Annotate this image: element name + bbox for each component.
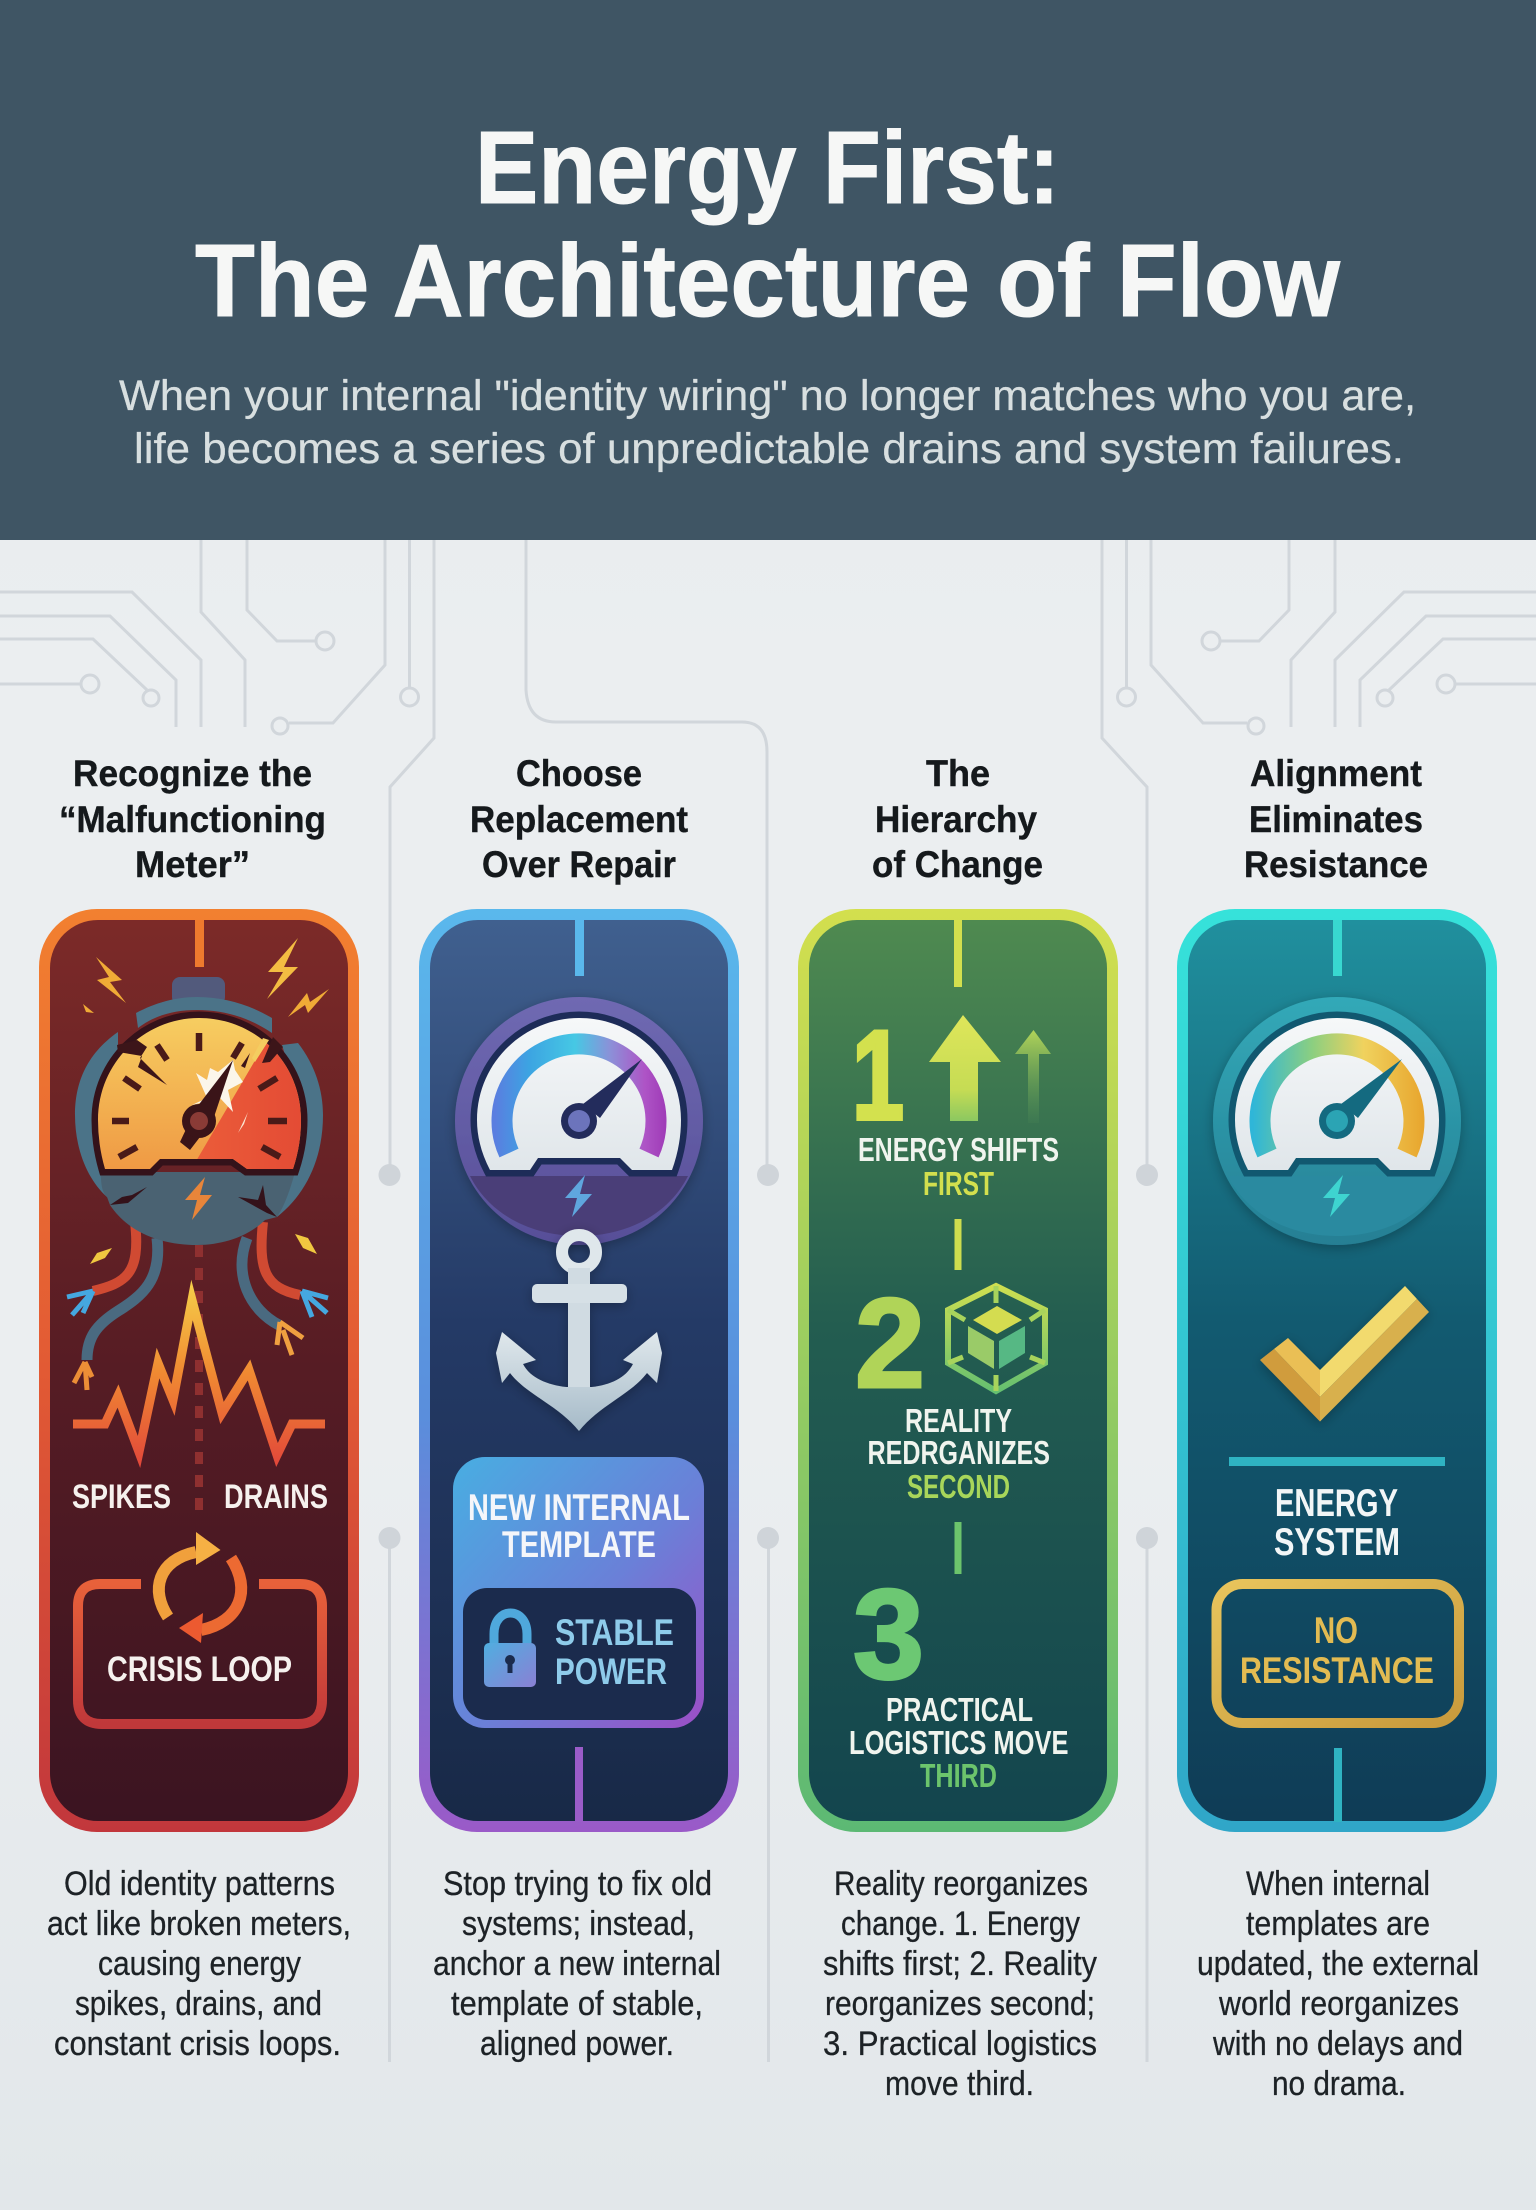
label: crisis loop: CRISIS LOOP	[107, 1650, 292, 1689]
chart: pulse line	[73, 1300, 325, 1455]
subtitle	[119, 372, 1416, 473]
icon: lock	[484, 1613, 536, 1687]
icon: up arrows	[929, 1015, 1051, 1123]
icon: stable gauge	[455, 997, 703, 1245]
description: column 2: Stop trying to fix old	[443, 1865, 712, 1903]
description: column 3: move third.	[885, 2065, 1034, 2103]
description: column 4: updated, the external	[1197, 1945, 1479, 1983]
icon: cracked gauge	[75, 977, 323, 1245]
description: column 4: no drama.	[1272, 2065, 1406, 2103]
column 3 heading: of Change	[872, 844, 1043, 885]
crisis loop box	[78, 1584, 322, 1724]
column 2 heading: Replacement	[470, 799, 688, 840]
step 1	[852, 1004, 1059, 1202]
header banner	[0, 0, 1536, 540]
icon: check mark	[1260, 1286, 1429, 1422]
description: column 4: When internal	[1246, 1865, 1430, 1903]
label: energy system	[1274, 1482, 1400, 1564]
description: column 1	[47, 1865, 351, 2063]
description: column 1: spikes, drains, and	[75, 1985, 322, 2023]
description: column 2	[433, 1865, 721, 2063]
step 3: 3	[853, 1563, 924, 1705]
label: energy system: ENERGY	[1275, 1482, 1398, 1525]
description: column 2: anchor a new internal	[433, 1945, 721, 1983]
icon: lightning bolts	[83, 938, 329, 1264]
icon: loop arrows	[159, 1532, 241, 1643]
step 2: SECOND	[907, 1468, 1010, 1505]
column 3 heading: The	[926, 753, 990, 794]
description: column 3: Reality reorganizes	[834, 1865, 1088, 1903]
description: column 3: shifts first; 2. Reality	[823, 1945, 1097, 1983]
title	[195, 110, 1341, 338]
description: column 3: reorganizes second;	[825, 1985, 1095, 2023]
box: no resistance	[1216, 1584, 1459, 1723]
icon: anchor	[496, 1235, 662, 1431]
description: column 1: constant crisis loops.	[54, 2025, 341, 2063]
box: new internal template: NEW INTERNAL	[468, 1487, 690, 1528]
description: column 1: act like broken meters,	[47, 1905, 351, 1943]
panel: replacement	[419, 909, 739, 1832]
labels: spikes and drains: DRAINS	[224, 1478, 328, 1516]
column 1 heading: “Malfunctioning	[59, 799, 326, 840]
column 4 heading: Resistance	[1244, 844, 1428, 885]
description: column 3	[823, 1865, 1097, 2103]
gauge dial	[98, 1018, 301, 1169]
step 1: ENERGY SHIFTS	[858, 1131, 1059, 1168]
description: column 3: 3. Practical logistics	[823, 2025, 1097, 2063]
description: column 4: with no delays and	[1212, 2025, 1463, 2063]
icon: aligned gauge	[1213, 997, 1461, 1245]
column 1 heading	[59, 753, 326, 885]
subtitle: life becomes a series of unpredictable drains and system failures.	[134, 425, 1404, 473]
description: column 4: world reorganizes	[1218, 1985, 1459, 2023]
step 2: REALITY	[905, 1402, 1012, 1439]
box: new internal template: TEMPLATE	[502, 1524, 656, 1565]
labels: spikes and drains: SPIKES	[72, 1478, 171, 1516]
column 3 heading: Hierarchy	[875, 799, 1037, 840]
description: column 2: systems; instead,	[462, 1905, 695, 1943]
description: column 4: templates are	[1246, 1905, 1430, 1943]
column 4 heading: Alignment	[1250, 753, 1422, 794]
box: new internal template	[453, 1457, 704, 1728]
title: Energy First:	[475, 110, 1060, 225]
step 3: LOGISTICS MOVE	[849, 1724, 1068, 1761]
description: column 3: change. 1. Energy	[841, 1905, 1080, 1943]
column 1 heading: Recognize the	[73, 753, 312, 794]
column 1 heading: Meter”	[135, 844, 250, 885]
step 2: 2	[855, 1272, 925, 1414]
background circuit traces	[0, 540, 1536, 2062]
label: energy system: SYSTEM	[1274, 1521, 1400, 1564]
step 1: FIRST	[923, 1165, 994, 1202]
description: column 4	[1197, 1865, 1479, 2103]
panel: alignment	[1177, 909, 1497, 1832]
step 2: REDRGANIZES	[868, 1434, 1050, 1471]
subtitle: When your internal "identity wiring" no longer matches who you are,	[119, 372, 1416, 420]
column 4 heading	[1244, 753, 1428, 885]
column 3 heading	[872, 753, 1043, 885]
labels: spikes and drains	[72, 1478, 328, 1516]
column 2 heading: Choose	[516, 753, 642, 794]
title: The Architecture of Flow	[195, 223, 1341, 338]
description: column 1: causing energy	[98, 1945, 301, 1983]
center dashed line	[195, 1245, 203, 1510]
box: new internal template: STABLE	[555, 1612, 674, 1653]
icon: frayed wires	[67, 1222, 328, 1390]
step 3	[849, 1563, 1068, 1794]
step 2	[855, 1272, 1050, 1505]
column 4 heading: Eliminates	[1249, 799, 1423, 840]
icon: cube	[948, 1286, 1045, 1391]
column 2 heading: Over Repair	[482, 844, 676, 885]
description: column 2: aligned power.	[480, 2025, 674, 2063]
step 1: 1	[852, 1004, 904, 1146]
box: new internal template: POWER	[555, 1651, 667, 1692]
box: no resistance: RESISTANCE	[1240, 1650, 1434, 1691]
step 3: PRACTICAL	[886, 1691, 1033, 1728]
description: column 1: Old identity patterns	[64, 1865, 335, 1903]
step 3: THIRD	[920, 1757, 997, 1794]
box: no resistance: NO	[1314, 1610, 1358, 1651]
panel: malfunctioning meter	[39, 909, 359, 1832]
panel: hierarchy of change	[798, 909, 1118, 1832]
description: column 2: template of stable,	[451, 1985, 703, 2023]
column 2 heading	[470, 753, 688, 885]
